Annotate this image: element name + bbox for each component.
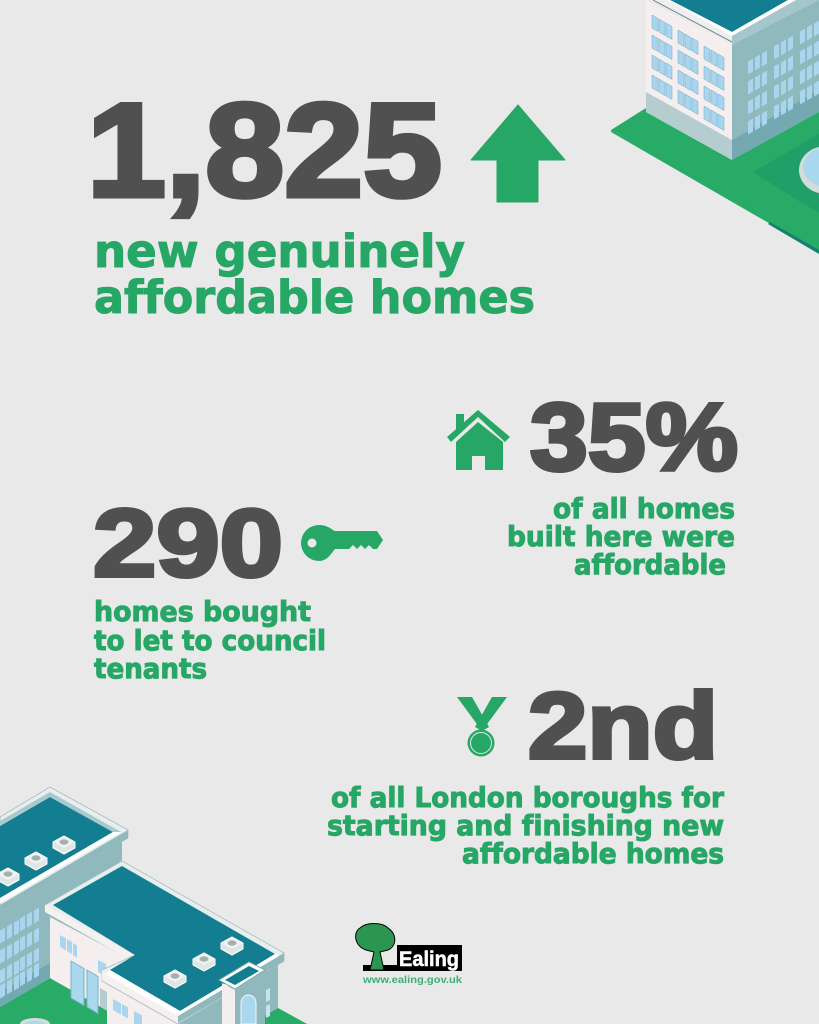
illustration: building bottom left (0, 787, 307, 1024)
icon: medal (457, 697, 507, 756)
caption: of all London boroughs: starting and finishing new (327, 809, 724, 842)
caption: of all homes built here were affordable (507, 492, 735, 581)
logo: Ealing: www.ealing.gov.uk (362, 974, 462, 986)
caption: homes bought to let to council tenants (94, 595, 326, 685)
logo: Ealing: Ealing (399, 948, 459, 971)
caption: of all homes built here were affordable: of all homes (553, 492, 735, 525)
stat: 35%: 35% (530, 384, 738, 491)
caption: of all London boroughs: of all London boroughs for (331, 781, 724, 814)
logo: Ealing (356, 924, 462, 986)
caption: homes bought to let to council tenants: homes bought (94, 595, 311, 628)
caption: of all London boroughs (327, 781, 724, 870)
stat: 1,825: 1,825 (87, 77, 442, 225)
icon: house (447, 410, 510, 470)
caption: of all homes built here were affordable: affordable (574, 548, 726, 581)
caption: new genuinely affordable homes: new genuinely (94, 225, 465, 278)
illustration: apartment building top right (611, 0, 819, 254)
caption: of all London boroughs: affordable homes (462, 837, 724, 870)
caption: homes bought to let to council tenants: tenants (94, 652, 207, 685)
caption: new genuinely affordable homes: affordable homes (94, 271, 535, 324)
caption: new genuinely affordable homes (94, 225, 535, 324)
icon: key (301, 525, 383, 561)
stat: 2nd: 2nd (528, 673, 718, 778)
caption: homes bought to let to council tenants: to let to council (94, 624, 326, 657)
caption: of all homes built here were affordable: built here were (507, 520, 735, 553)
stat: 290: 290 (93, 490, 283, 597)
icon: up arrow (471, 105, 565, 202)
